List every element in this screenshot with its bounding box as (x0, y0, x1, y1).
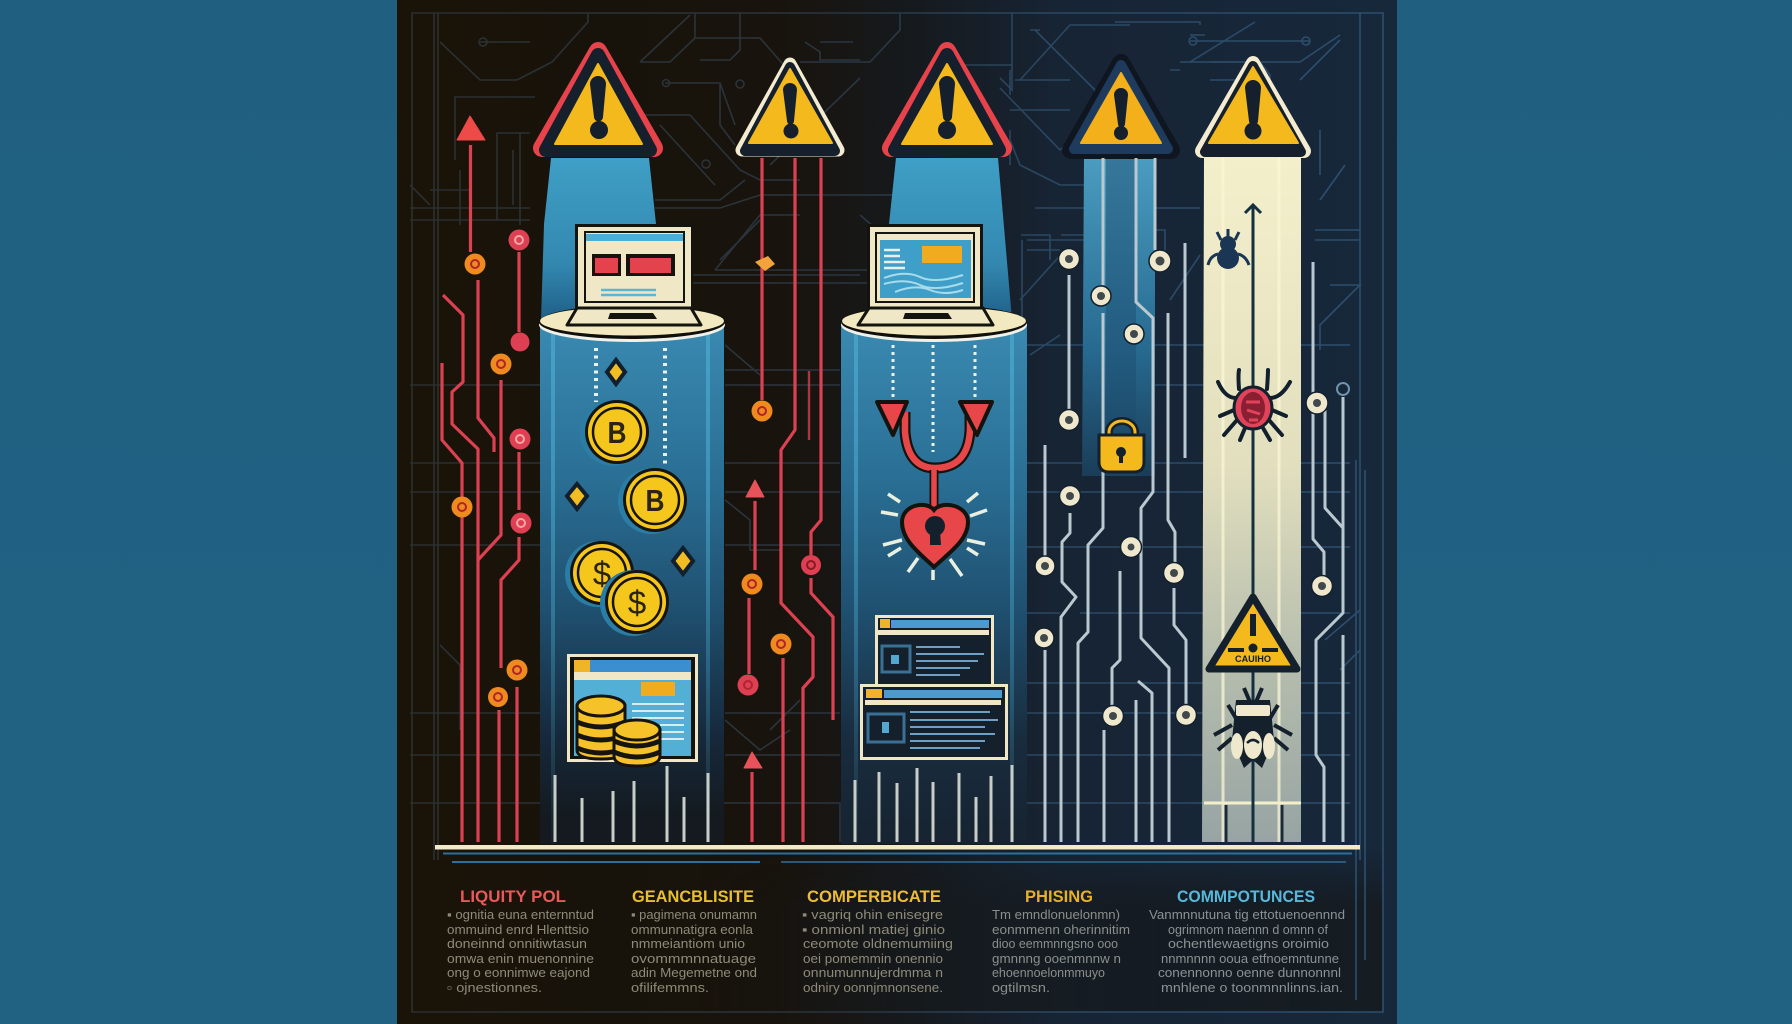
bug: small navy (1208, 229, 1249, 269)
red and orange nodes (452, 230, 821, 707)
body text: ochentlewaetigns oroimio (1168, 936, 1329, 951)
body text: ovommmnnatuage (631, 951, 756, 966)
body text: dioo eemmnngsno ooo (992, 936, 1118, 951)
text column: liquidity pool (447, 887, 594, 995)
panel: compromised certificate column (841, 322, 1027, 844)
body text: mnhlene o toonmnnlinns.ian. (1161, 980, 1343, 995)
coin: bitcoin 1 (580, 400, 649, 466)
body text: nnmnnnn ooua etfnoemntunne (1161, 951, 1339, 966)
coin: bitcoin 1: B (608, 415, 626, 450)
cream circuit nodes (1034, 248, 1332, 726)
body text: ong o eonnimwe eajond (447, 965, 590, 980)
floor line (435, 845, 1360, 863)
arrowhead: hook left (877, 402, 907, 435)
body text (992, 907, 1130, 995)
body text: ehoennoelonmmuyo (992, 965, 1105, 980)
heart lock icon (881, 493, 987, 580)
arrowhead: hook right (960, 402, 992, 435)
body text: adin Megemetne ond (631, 965, 757, 980)
body text: Vanmnnutuna tig ettotuenoennnd (1149, 907, 1345, 922)
body text: doneinnd onnitiwtasun (447, 936, 587, 951)
pale circuit lines and nodes (1045, 158, 1343, 842)
heading: GEANCBLISITE (632, 887, 754, 906)
heading: PHISING (1025, 887, 1093, 906)
body text: eonmmenn oherinnitim (992, 922, 1130, 937)
coin: dollar 2 (600, 570, 669, 636)
bug: beetle (1214, 688, 1292, 768)
body text: ▪ ognitia euna enternntud (447, 907, 594, 922)
body text: Tm emndlonuelonmn) (992, 907, 1120, 922)
beam: warning 1 (541, 158, 660, 320)
body text: onnumunnujerdmma n (803, 965, 943, 980)
text column: compromises (1149, 887, 1345, 995)
warning triangle 4 (1071, 63, 1171, 150)
panel: text area shade (984, 868, 1382, 1012)
warning triangle 1 (542, 51, 654, 150)
arrow up: middle red 2 (744, 752, 762, 768)
heading: COMPERBICATE (807, 887, 941, 906)
warning triangle 3 (891, 51, 1003, 150)
circuit board background traces (410, 13, 1383, 1012)
body text: oei pomemmin onennio (803, 951, 943, 966)
arrow hook icon (877, 402, 992, 510)
panel: main dark board (397, 0, 1397, 1024)
arrow up: left red (457, 116, 485, 140)
body text: omwa enin muenonnine (447, 951, 594, 966)
body text: conennonno oenne dunnonnnl (1158, 965, 1341, 980)
body text: ofilifemmns. (631, 980, 709, 995)
warning triangle 5 (1202, 63, 1304, 152)
body text: ogrimnom naennn d omnn of (1168, 922, 1328, 937)
heading: LIQUITY POL (460, 887, 566, 906)
panel: liquidity pool column (540, 322, 724, 844)
cylinder cap 2 (841, 305, 1027, 342)
coin: bitcoin 2 (618, 468, 687, 534)
body text: ommunnatigra eonla (631, 922, 754, 937)
coin: dollar 1: $ (593, 555, 611, 592)
browser window: certificate lower (860, 684, 1008, 760)
text column: compromised certificate (802, 887, 953, 995)
warning triangle 2 (742, 64, 838, 151)
dotted lines in column 2 (893, 345, 975, 452)
body text (631, 907, 757, 995)
body text: ogtilmsn. (992, 980, 1050, 995)
browser window: certificate upper (875, 615, 994, 686)
beam: warning 4 (1082, 158, 1155, 476)
arrow: dark vertical in bright beam (1245, 205, 1261, 842)
body text: ommuind enrd Hlenttsio (447, 922, 589, 937)
caution sign: CAUIHO (1235, 654, 1271, 664)
body text: ▪ pagimena onumamn (631, 907, 757, 922)
laptop 2 (858, 224, 993, 325)
coin stack: front (614, 720, 660, 766)
body text: ▫ ojnestionnes. (447, 980, 542, 995)
ground ticks: columns (555, 765, 1012, 842)
dotted lines in column 1 (596, 348, 665, 468)
body text: odniry oonnjmnonsene. (803, 980, 943, 995)
coin stack: back (577, 696, 625, 759)
body text: ▪ onmionl matiej ginio (802, 922, 945, 937)
arrow up: middle red 1 (746, 480, 764, 497)
heading: COMMPOTUNCES (1177, 887, 1315, 906)
body text: gmnnng ooenmnnw n (992, 951, 1121, 966)
body text: ceomote oldnemumiing (803, 936, 953, 951)
heart rays (881, 493, 987, 580)
browser window with coin stacks (567, 654, 698, 762)
padlock icon (1099, 421, 1144, 472)
body text (802, 907, 953, 995)
beam: warning 5 (1202, 158, 1301, 842)
sparkle icons (567, 360, 693, 574)
coin: dollar 2: $ (628, 584, 646, 621)
bug: red spider (1218, 370, 1290, 440)
caution sign (1209, 597, 1297, 669)
laptop 1 (567, 224, 701, 325)
body text (447, 907, 594, 995)
coin: bitcoin 2: B (646, 483, 664, 518)
body text: ▪ vagriq ohin enisegre (802, 907, 943, 922)
text column: phishing (992, 887, 1130, 995)
cylinder cap 1 (539, 305, 725, 342)
coin: dollar 1 (565, 541, 634, 607)
beam: warning 3 (883, 158, 1012, 320)
red circuit lines and nodes (442, 116, 833, 842)
body text (1149, 907, 1345, 995)
body text: nmmeiantiom unio (631, 936, 745, 951)
text column: genuine website (631, 887, 757, 995)
